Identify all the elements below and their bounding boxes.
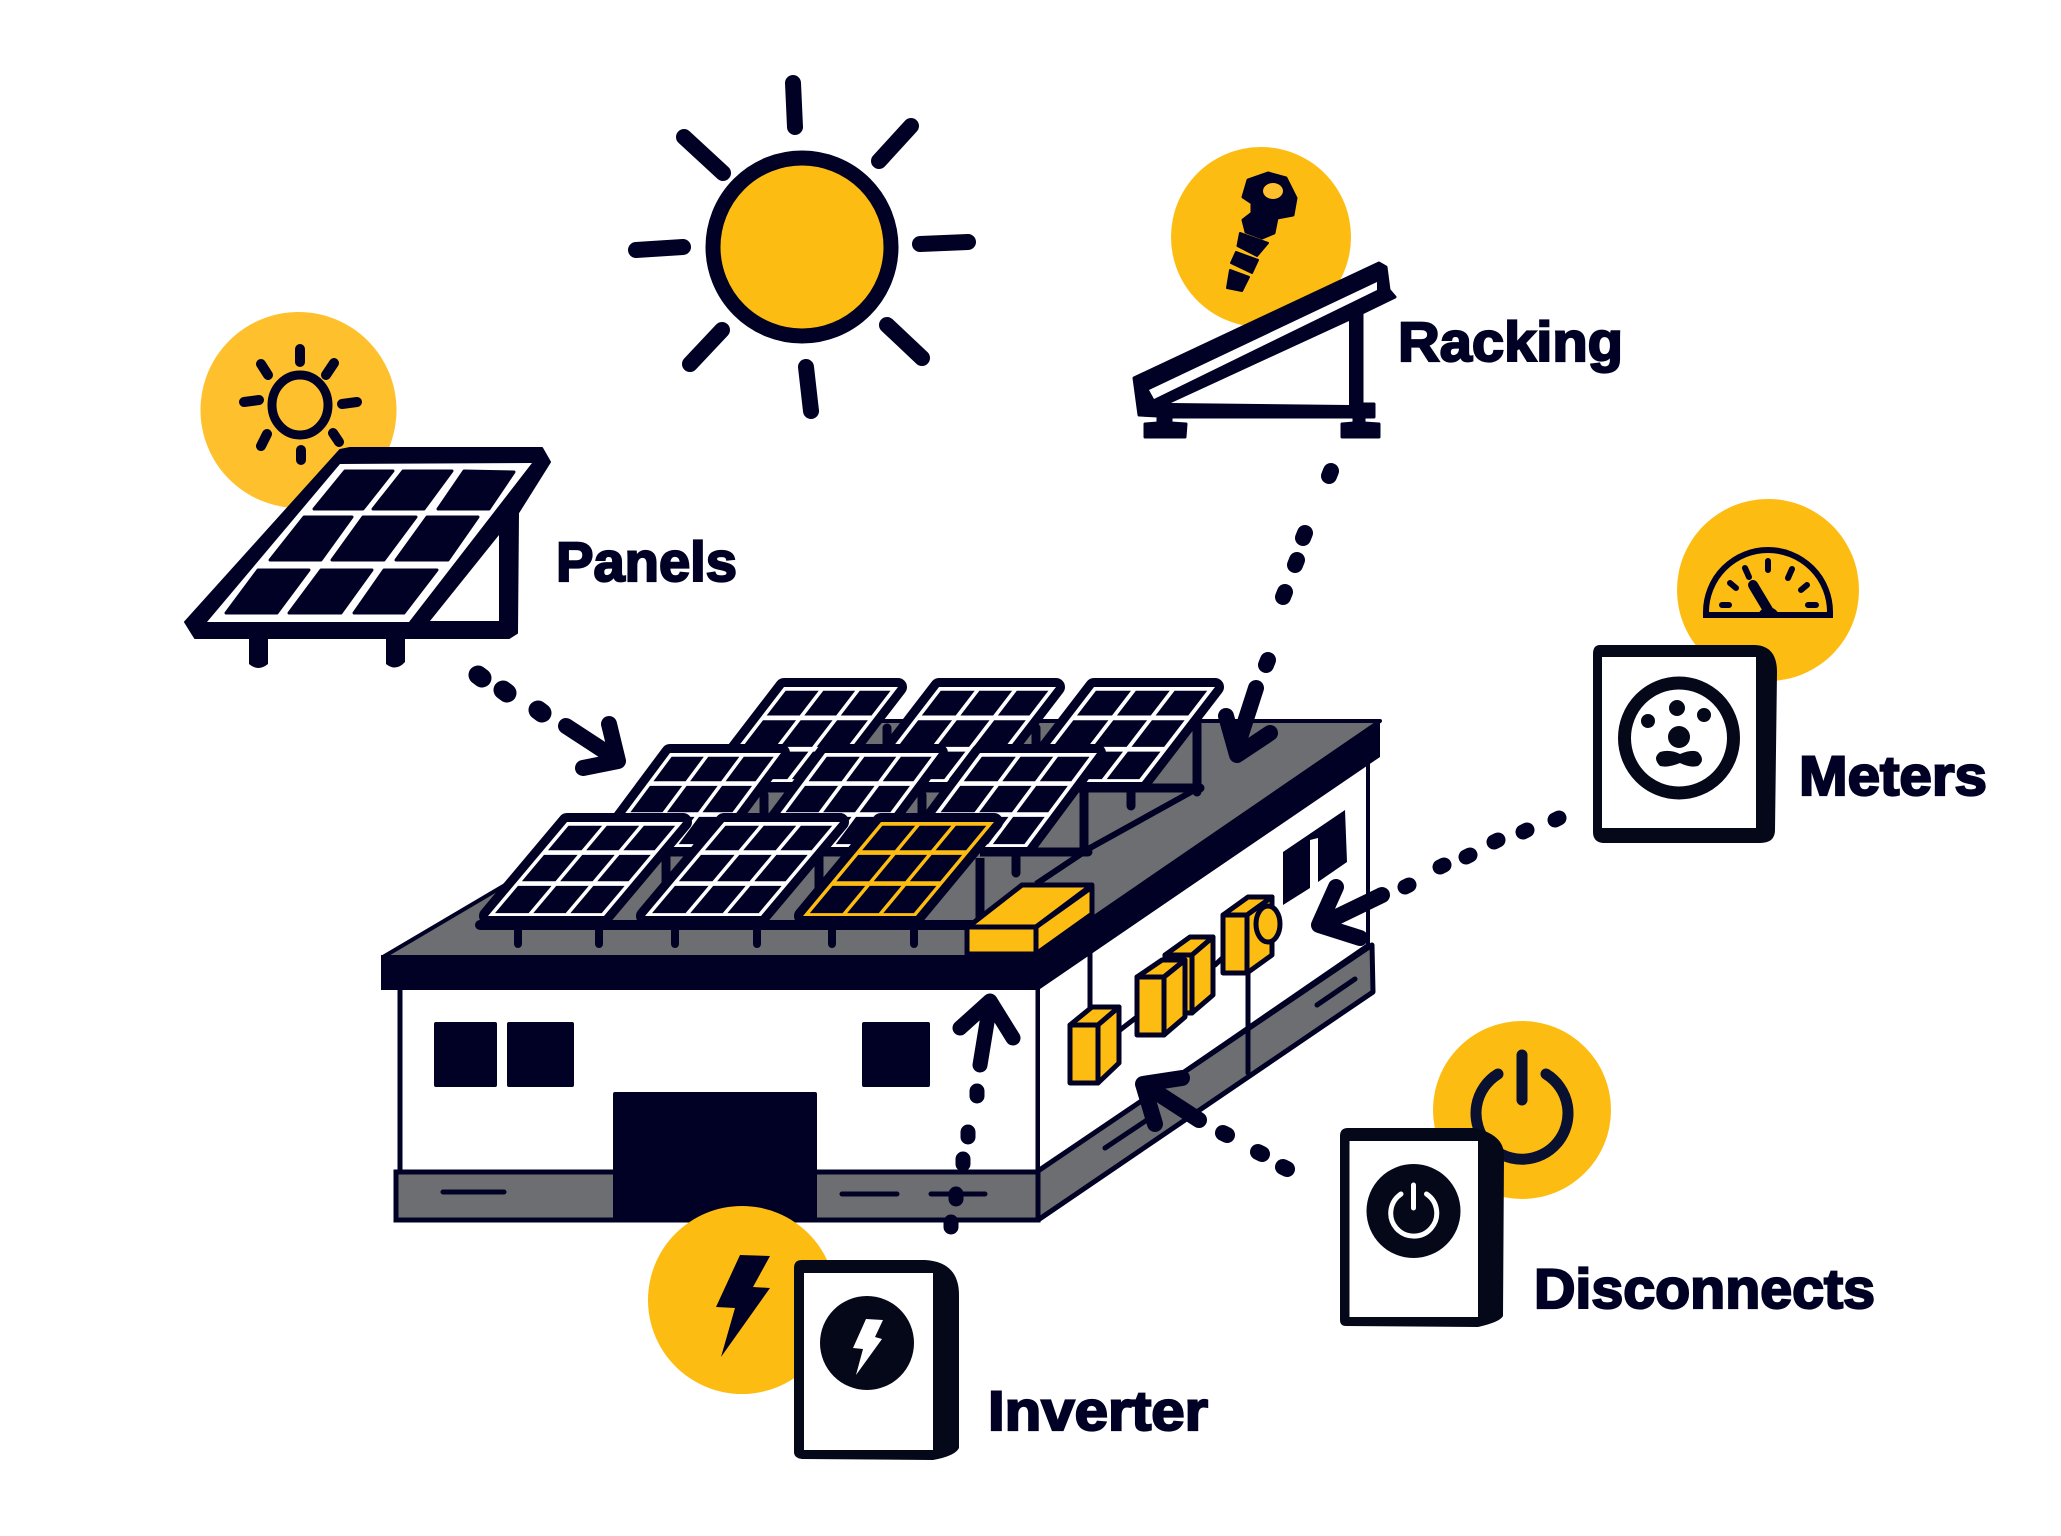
conduit lines	[1090, 948, 1248, 1073]
highlighted panel	[803, 822, 994, 916]
combiner box front	[1137, 960, 1185, 1035]
solar array	[480, 687, 1215, 954]
icon: inverter box	[794, 1260, 959, 1460]
arrow: racking to roof	[1226, 471, 1331, 755]
icon: large sun	[636, 83, 968, 411]
window left pair	[434, 1022, 574, 1087]
junction box 1	[1070, 1007, 1119, 1083]
rooftop yellow box	[967, 885, 1092, 954]
icon: power symbol	[1476, 1055, 1568, 1159]
circle	[200, 312, 396, 508]
arrow: inverter to roof	[951, 1001, 1013, 1227]
icon: gauge	[1706, 550, 1830, 615]
building	[381, 720, 1380, 1222]
roof fascia	[381, 720, 1380, 990]
disconnects group	[1143, 1021, 1875, 1327]
label: Racking: Racking	[1398, 310, 1623, 373]
arrow: panels to roof	[478, 675, 618, 768]
icon: lightning bolt	[716, 1255, 770, 1357]
arrow: disconnects to wall	[1143, 1078, 1287, 1169]
circle	[648, 1206, 836, 1394]
front wall	[400, 985, 1038, 1175]
circle	[1171, 147, 1351, 327]
meter box	[1223, 897, 1280, 973]
side wall	[1038, 762, 1368, 1172]
door	[613, 1092, 817, 1222]
icon: meter box	[1593, 645, 1777, 843]
icon: screw	[1227, 173, 1296, 291]
label: Panels: Panels	[556, 530, 737, 593]
window right	[862, 1022, 930, 1087]
racking group	[1134, 147, 1623, 755]
label: Disconnects: Disconnects	[1534, 1257, 1875, 1320]
icon: small sun	[244, 349, 357, 460]
side window	[1283, 810, 1347, 905]
mounting rails	[1036, 787, 1200, 884]
circle	[1677, 499, 1859, 681]
icon: rack	[1134, 263, 1395, 437]
label: Meters: Meters	[1799, 744, 1987, 807]
circle	[1433, 1021, 1611, 1199]
combiner box back	[1165, 937, 1213, 1013]
front row panels	[480, 815, 994, 944]
back row panels	[711, 687, 1215, 806]
arrow: meters to wall	[1319, 818, 1559, 938]
inverter group	[648, 1001, 1208, 1460]
middle row panels	[600, 753, 1097, 873]
side base strip	[1038, 945, 1373, 1220]
icon: panel	[185, 448, 550, 668]
icon: disconnect box	[1340, 1128, 1504, 1327]
meters group	[1319, 499, 1987, 938]
label: Inverter: Inverter	[988, 1379, 1208, 1442]
front base strip	[396, 1172, 1038, 1220]
roof deck	[383, 721, 1380, 957]
panels group	[185, 312, 737, 768]
